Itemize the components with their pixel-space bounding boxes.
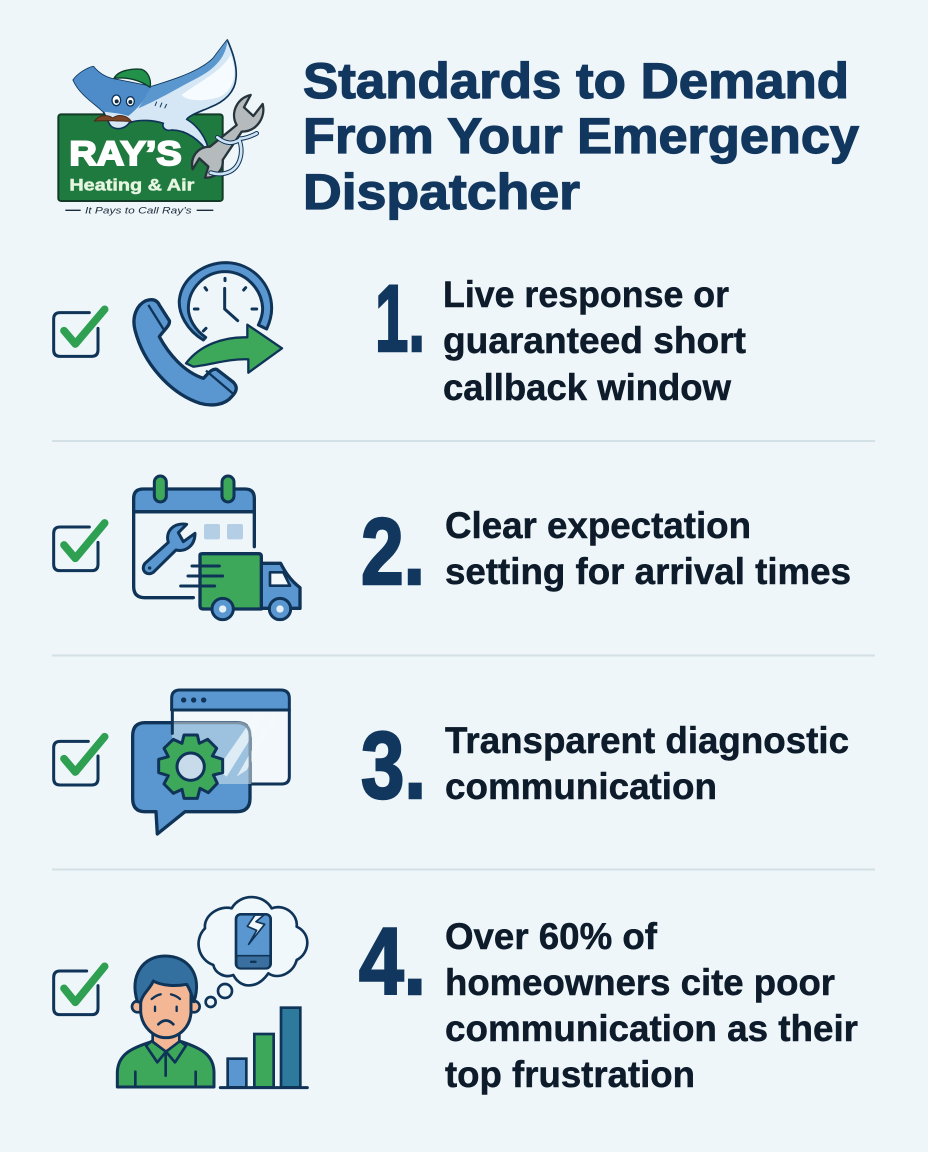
number 4: 4.	[359, 909, 426, 1015]
text: item 2: setting for arrival times	[445, 551, 851, 592]
text: item 4: communication as their	[445, 1008, 858, 1049]
text: item 1	[443, 274, 746, 408]
item 2: arrival times	[54, 476, 851, 620]
number 1: 1.	[375, 266, 425, 372]
checkbox 1	[54, 309, 105, 356]
text: item 1: callback window	[443, 367, 731, 408]
number 3: 3.	[361, 713, 426, 819]
item 1: live response	[54, 263, 746, 408]
item 3: diagnostic communication	[54, 690, 849, 834]
title	[303, 53, 859, 220]
logo tagline: It Pays to Call Ray’s	[85, 205, 192, 215]
logo wrench	[192, 95, 263, 178]
icon: worried person, thought bubble and bar chart	[117, 897, 307, 1088]
logo green sign: Heating & Air	[69, 175, 195, 194]
text: item 1: Live response or	[443, 274, 729, 315]
text: item 3	[445, 720, 849, 807]
text: item 3: communication	[445, 766, 717, 807]
icon: chat bubble, window and gear	[133, 690, 289, 834]
checkbox 4	[54, 966, 105, 1015]
checkbox 2	[54, 523, 105, 571]
number 2: 2.	[361, 499, 425, 605]
logo stingray mascot	[73, 40, 236, 155]
logo green sign	[58, 114, 223, 201]
text: item 2: Clear expectation	[445, 505, 751, 546]
title: Dispatcher	[303, 164, 580, 220]
logo: Ray's Heating & Air	[58, 40, 263, 215]
text: item 4: top frustration	[445, 1054, 695, 1095]
text: item 2	[445, 505, 851, 592]
checkbox 3	[54, 737, 105, 785]
title: Standards to Demand	[303, 53, 849, 109]
icon: calendar, wrench and truck	[134, 476, 300, 620]
text: item 4: Over 60% of	[445, 916, 658, 957]
text: item 1: guaranteed short	[443, 320, 746, 361]
title: From Your Emergency	[303, 108, 859, 164]
text: item 4: homeowners cite poor	[445, 962, 835, 1003]
logo green sign: RAY’S	[69, 135, 182, 173]
text: item 4	[445, 916, 858, 1095]
text: item 3: Transparent diagnostic	[445, 720, 849, 761]
item 4: poor communication statistic	[54, 897, 858, 1095]
icon: phone, clock and arrow	[134, 263, 282, 405]
